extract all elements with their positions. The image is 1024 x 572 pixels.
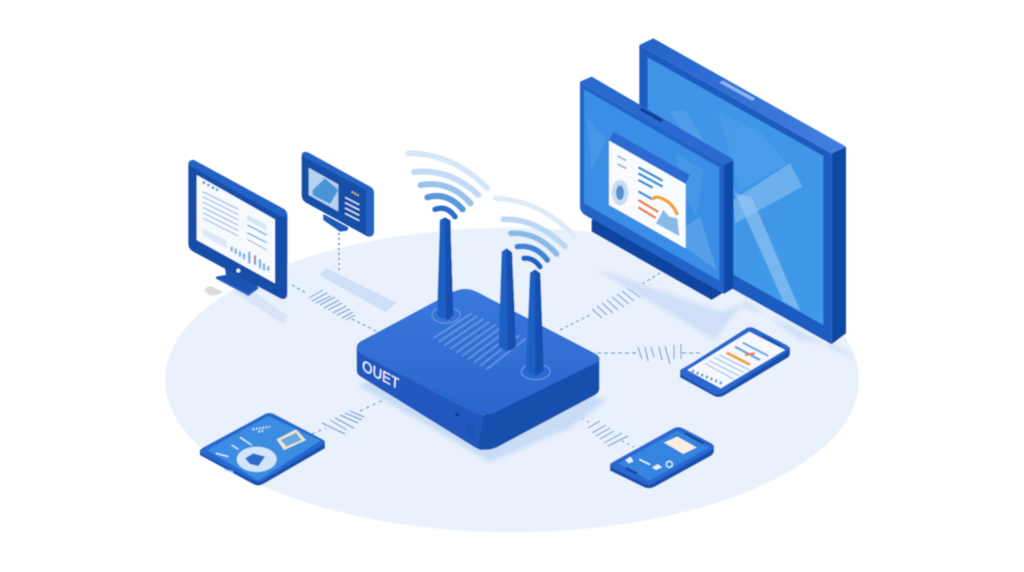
scene bbox=[165, 38, 860, 532]
screen bbox=[687, 332, 785, 388]
shadow: small monitor floor bbox=[319, 268, 397, 312]
screen bbox=[648, 57, 823, 325]
inner card bbox=[609, 141, 686, 248]
text lines bbox=[705, 355, 749, 379]
icons bbox=[639, 459, 650, 465]
card chart bbox=[656, 210, 679, 236]
body bbox=[610, 430, 714, 488]
card bars bbox=[638, 167, 663, 199]
screen bbox=[584, 89, 719, 281]
stand bbox=[204, 268, 258, 296]
side bbox=[724, 160, 733, 294]
shadow: left monitor floor bbox=[232, 287, 288, 324]
port dot bbox=[455, 413, 459, 417]
body bbox=[680, 330, 790, 397]
connector: small monitor dotted drop bbox=[338, 228, 340, 273]
card brain figure bbox=[612, 180, 628, 205]
side face bbox=[832, 147, 846, 344]
right front face bbox=[478, 358, 599, 450]
top sensor bar bbox=[719, 81, 755, 101]
floor ellipse bbox=[165, 228, 859, 532]
wifi signal left bbox=[408, 153, 487, 217]
front monitor bbox=[580, 77, 733, 300]
chart bars bbox=[727, 353, 750, 365]
card labels bbox=[618, 156, 626, 168]
antenna rings bbox=[432, 307, 460, 323]
upper phone bbox=[680, 327, 790, 397]
mount bbox=[323, 214, 348, 232]
body bbox=[302, 152, 374, 237]
router bbox=[357, 217, 600, 450]
router label: OUET bbox=[362, 358, 400, 394]
photo card bbox=[277, 429, 306, 450]
wifi signal right bbox=[496, 198, 574, 267]
white screen bbox=[197, 175, 275, 283]
floor shadow: large monitors bbox=[594, 268, 860, 362]
card bbox=[664, 437, 697, 454]
top face bbox=[357, 289, 600, 415]
antenna 1 bbox=[437, 217, 453, 319]
arcs bbox=[408, 153, 487, 188]
screen bbox=[309, 168, 338, 212]
logo dots bbox=[203, 182, 218, 190]
left front face bbox=[357, 347, 483, 450]
grille bbox=[433, 313, 526, 369]
front face bbox=[639, 45, 832, 344]
antenna 3 bbox=[526, 269, 544, 375]
icons row bbox=[692, 371, 723, 384]
dashboard bars and text bbox=[203, 228, 227, 248]
connector: tablet to router bbox=[312, 396, 392, 434]
notch bbox=[626, 433, 703, 473]
body bbox=[200, 415, 325, 485]
connector: router to upper phone bbox=[597, 344, 702, 364]
notch bbox=[763, 336, 781, 346]
document lines bbox=[203, 192, 238, 236]
screen light shards bbox=[735, 193, 800, 311]
left desktop monitor bbox=[188, 160, 287, 299]
monitor body bbox=[188, 160, 287, 299]
antenna 2 bbox=[499, 248, 516, 351]
large back monitor bbox=[639, 38, 846, 344]
connector: left monitor to router bbox=[292, 285, 378, 332]
inner card frame bbox=[609, 132, 690, 184]
small wall display bbox=[302, 152, 374, 237]
top face bbox=[639, 38, 846, 153]
circle widget bbox=[237, 447, 277, 472]
tablet bbox=[200, 413, 325, 485]
top bbox=[580, 77, 733, 165]
text lines bbox=[345, 197, 359, 221]
router shadow bbox=[358, 378, 607, 462]
base bbox=[592, 217, 725, 300]
screen bbox=[207, 416, 321, 481]
lower phone bbox=[610, 427, 714, 488]
front bbox=[580, 82, 724, 294]
connector: router to lower phone bbox=[582, 418, 634, 447]
screen bbox=[618, 431, 709, 481]
connector: large monitors to router bbox=[560, 273, 660, 330]
notch bbox=[639, 108, 664, 122]
icons bbox=[216, 437, 252, 457]
